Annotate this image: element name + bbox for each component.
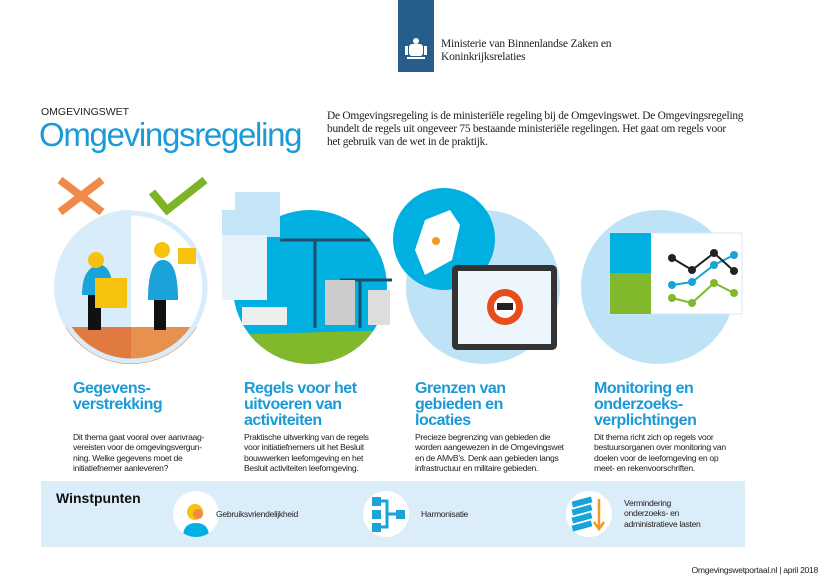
text 3 [415,432,564,473]
text 2: bouwwerken leefomgeving en het [244,453,363,463]
heading 3: locaties [415,412,471,429]
heading 2 [244,380,357,429]
heading 1 [73,380,162,413]
heading 4: Monitoring en [594,380,693,397]
label [624,498,701,529]
heading 1: verstrekking [73,396,162,413]
intro text: het gebruik van de wet in de praktijk. [327,136,488,148]
label: Vermindering [624,498,671,508]
text 1: initiatiefnemer aanleveren? [73,463,168,473]
heading 1: Gegevens- [73,380,150,397]
footer: Omgevingswetportaal.nl | april 2018 [692,565,818,575]
title: Omgevingsregeling [39,116,301,153]
label: Gebruiksvriendelijkheid [216,509,298,519]
text 2: Besluit activiteiten leefomgeving. [244,463,358,473]
text 4: meet- en rekenvoorschriften. [594,463,695,473]
label: Harmonisatie [421,509,468,519]
text 1: Dit thema gaat vooral over aanvraag- [73,432,204,442]
panel: winstpunten [41,481,745,547]
icon: cross [60,180,102,212]
text 3: infrastructuur en militaire gebieden. [415,463,538,473]
label: administratieve lasten [624,519,701,529]
text 2 [244,432,369,473]
text 4 [594,432,726,473]
heading 3: gebieden en [415,396,503,413]
intro text [327,110,744,148]
icon: check [152,180,205,210]
text 1 [73,432,204,473]
intro text: bundelt de regels uit ongeveer 75 bestaande ministeriële regelingen. Het gaat om regels voor [327,123,726,135]
illustration: grenzen [393,188,560,364]
icon: user [173,491,219,537]
text 1: ning. Welke gegevens moet de [73,453,182,463]
heading 4: onderzoeks- [594,396,683,413]
ministry name [441,38,612,63]
text 4: doelen voor de leefomgeving en op [594,453,718,463]
text 3: worden aangewezen in de Omgevingswet [415,442,564,452]
ministry name: Ministerie van Binnenlandse Zaken en [441,38,611,50]
text 2: Praktische uitwerking van de regels [244,432,369,442]
heading 2: uitvoeren van [244,396,342,413]
supertitle: OMGEVINGSWET [41,106,129,118]
text 2: voor initiatiefnemers uit het Besluit [244,442,364,452]
intro text: De Omgevingsregeling is de ministeriële regeling bij de Omgevingswet. De Omgevingsregeling [327,110,743,122]
heading: Winstpunten [56,490,141,506]
heading 4: verplichtingen [594,412,696,429]
heading 3 [415,380,506,429]
ministry name: Koninkrijksrelaties [441,51,525,63]
icon: documents [566,491,612,537]
heading 2: Regels voor het [244,380,357,397]
illustration: gegevensverstrekking [54,176,208,364]
text 3: en de AMvB’s. Denk aan gebieden langs [415,453,559,463]
text 1: vereisten voor de omgevingsvergun- [73,442,202,452]
illustration: monitoring [581,210,742,364]
heading 2: activiteiten [244,412,322,429]
icon: harmonisatie [363,491,409,537]
heading 3: Grenzen van [415,380,506,397]
documents [222,192,280,300]
label: onderzoeks- en [624,508,679,518]
logo bar [398,0,434,72]
heading 4 [594,380,696,429]
illustration: regels [222,192,392,364]
circle [54,210,208,364]
text 3: Precieze begrenzing van gebieden die [415,432,550,442]
text 4: Dit thema richt zich op regels voor [594,432,713,442]
text 4: bestuursorganen over monitoring van [594,442,726,452]
